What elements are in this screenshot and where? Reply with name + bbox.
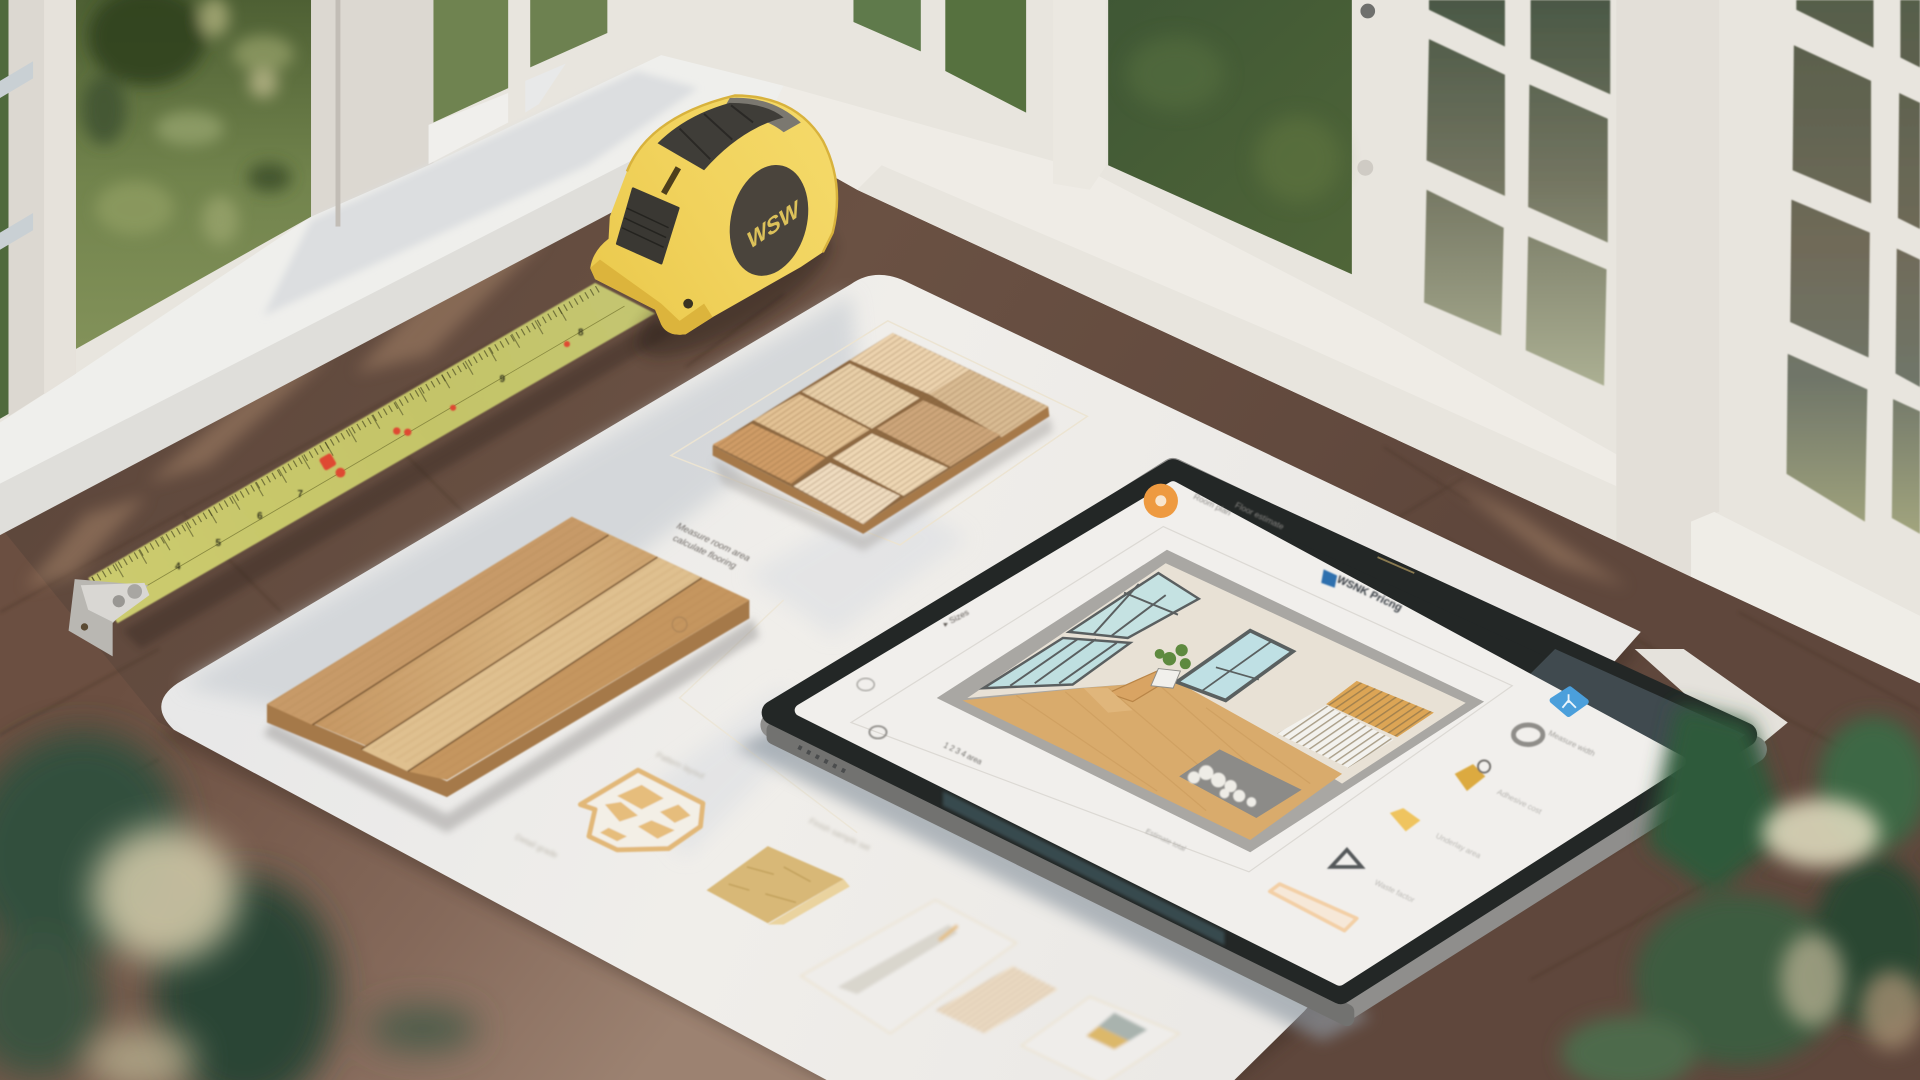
foreground foliage left — [0, 692, 478, 1080]
list: yellow swatch — [1390, 808, 1483, 861]
right bokeh low — [1861, 971, 1920, 1049]
room floor — [962, 681, 1342, 840]
bottom toolbar icon — [869, 726, 887, 738]
card far right — [1021, 997, 1179, 1080]
garden foliage: left — [82, 0, 294, 245]
plank top — [267, 517, 749, 780]
white wall and window frames — [0, 0, 1920, 683]
lock ribs — [622, 208, 669, 247]
shield panels — [600, 785, 691, 841]
plank grain — [267, 517, 749, 780]
hook rivet 2 — [113, 595, 125, 607]
sill: left — [0, 55, 784, 533]
tape red marks — [319, 341, 570, 478]
orange badge — [1144, 484, 1178, 518]
sheet upper shade — [181, 294, 857, 735]
post shading — [336, 0, 340, 227]
list: ring icon — [1513, 725, 1597, 758]
header text: Room plan — [1192, 491, 1233, 518]
tablet — [735, 471, 1753, 1041]
corner pane 2 — [945, 0, 1026, 113]
sunlit reveal under pane — [429, 93, 508, 164]
plank knot — [672, 617, 687, 632]
floor boards — [1016, 683, 1310, 811]
lower sample cards — [801, 900, 1179, 1080]
side label: ▸ Sizes — [941, 607, 971, 629]
bezel reflection lower — [943, 791, 1224, 945]
view: far left sliver — [0, 0, 9, 419]
far right sill — [1691, 512, 1920, 683]
sheet shading bands — [637, 490, 967, 857]
tape case shadow — [622, 209, 847, 379]
rug fluff — [1188, 765, 1256, 807]
right window panes — [1424, 0, 1610, 386]
tablet screen — [801, 487, 1680, 980]
right window hardware — [1357, 4, 1375, 176]
right bokeh mid — [1780, 933, 1844, 1026]
dim panel label: Estimate total — [1144, 826, 1188, 853]
triangle label: Waste factor — [1373, 878, 1417, 905]
left post shade — [311, 0, 433, 230]
far right window panes — [1787, 0, 1920, 534]
card stripes on oak — [936, 966, 1058, 1033]
swatch label: Underlay area — [1434, 831, 1483, 861]
caption second line: calculate flooring — [671, 533, 739, 571]
sill: right front face — [857, 165, 1616, 541]
tape fine ticks — [93, 288, 600, 580]
tape numbers: 5 — [216, 538, 222, 549]
large oak plank sample — [263, 517, 759, 833]
header text 2: Floor estimate — [1233, 500, 1286, 532]
logo text: WSW — [746, 195, 801, 256]
lock slot — [664, 168, 678, 193]
tape numbers — [175, 328, 584, 572]
window bars — [1010, 584, 1178, 686]
sill: left shadow — [263, 71, 698, 316]
tiles — [713, 333, 1048, 524]
upper left pane 2 — [530, 0, 607, 67]
bezel reflection — [1518, 649, 1745, 784]
tape numbers: 8 — [578, 328, 584, 339]
badge core — [1155, 495, 1166, 506]
plant stand — [1108, 671, 1173, 702]
frame: far left bars — [0, 61, 33, 250]
paper sheet — [161, 275, 1641, 1080]
square top — [707, 846, 844, 923]
upper left pane — [433, 0, 508, 122]
tablet bezel — [774, 471, 1745, 992]
wood tile sample — [713, 333, 1053, 551]
sill: left front face — [0, 108, 759, 535]
room drawing — [937, 550, 1484, 852]
tape centre line — [122, 306, 624, 600]
caption beside planks: Measure room area — [675, 521, 752, 563]
left tool icon — [857, 678, 874, 691]
ring label: Measure width — [1547, 729, 1597, 758]
plant — [1155, 644, 1191, 669]
tile sample shadow — [713, 416, 1053, 551]
tape long ticks — [96, 306, 576, 584]
grip ribs — [680, 105, 753, 159]
big window lower pane — [983, 638, 1130, 688]
grip outer — [720, 98, 801, 132]
sample outline — [671, 321, 1087, 545]
tile sample thickness — [713, 407, 1049, 534]
card chart accent — [939, 926, 958, 940]
orange blind — [1326, 681, 1434, 737]
tape hook — [69, 579, 149, 656]
plank tone 1 — [267, 517, 609, 725]
sheet label: Pattern layout — [654, 750, 707, 781]
sheet labels: Detail grade — [513, 832, 560, 860]
lock slider — [617, 189, 678, 263]
shield icon — [580, 770, 703, 850]
tape numbers: 4 — [175, 561, 181, 572]
room frame — [937, 550, 1484, 852]
logo oval — [719, 157, 819, 284]
foreground foliage right — [1561, 704, 1920, 1080]
tile base — [713, 333, 1048, 524]
sunlit reveal 2 — [525, 64, 566, 113]
tablet underside — [774, 730, 1347, 1019]
frame: far left post light — [44, 0, 76, 394]
right bokeh — [1762, 798, 1880, 867]
frame: far left post — [9, 0, 76, 416]
bokeh highlight low — [86, 1029, 196, 1080]
window block right of corner — [1053, 0, 1106, 190]
tape blade — [88, 283, 655, 623]
plant pot — [1151, 669, 1180, 688]
outline lower section — [680, 600, 857, 833]
card chart strip — [838, 924, 958, 994]
tape numbers: 6 — [257, 511, 263, 522]
tile grain — [713, 333, 1048, 524]
right post — [1616, 0, 1719, 577]
sheet labels — [513, 750, 873, 860]
sill: right shelf — [759, 86, 1616, 541]
tablet shadow — [735, 722, 1371, 1041]
plank tone 2 — [361, 557, 702, 771]
plank edge — [267, 600, 749, 797]
bokeh highlight — [92, 827, 239, 961]
tape measure — [69, 96, 847, 656]
small window — [1177, 631, 1293, 700]
room wall — [967, 563, 1466, 784]
list: bucket icon — [1455, 760, 1544, 816]
blue action button — [1553, 689, 1586, 714]
app title: WSNK Pricng — [1334, 574, 1404, 614]
rug — [1179, 749, 1302, 818]
bench — [1084, 688, 1133, 713]
big window — [983, 573, 1199, 688]
square grain — [729, 867, 811, 902]
tape numbers: 7 — [298, 489, 304, 500]
case base shade — [590, 260, 713, 335]
square pale edge — [768, 879, 850, 924]
plank tone 3 — [408, 578, 749, 780]
tape numbers: 9 — [500, 374, 506, 385]
case rim — [627, 96, 837, 252]
centre garden mottling — [1127, 37, 1341, 202]
sheet shadow — [159, 294, 1641, 1080]
blue logo — [1321, 569, 1337, 588]
blue action glyph — [1562, 694, 1576, 708]
small oak square — [707, 846, 850, 924]
strip beside tablet — [1635, 649, 1788, 753]
radiator slats — [1277, 705, 1393, 768]
camera notch — [1378, 557, 1414, 573]
card swatch gold — [1086, 1026, 1129, 1049]
white radiator — [1277, 705, 1393, 768]
hook rivets — [127, 584, 142, 599]
card swatch teal — [1098, 1013, 1147, 1041]
plank shadow — [263, 618, 759, 833]
bottom toolbar text: 1 2 3 4 area — [942, 741, 984, 767]
corner panes — [853, 0, 921, 51]
small window bar — [1202, 642, 1271, 691]
tape shadow — [122, 321, 673, 649]
tablet speaker holes — [798, 747, 850, 774]
view: centre garden — [1108, 0, 1352, 274]
list: triangle icon — [1331, 850, 1417, 905]
bucket handle — [1478, 760, 1490, 773]
card oak — [936, 966, 1058, 1033]
blind slats — [1326, 681, 1434, 737]
case foot hole — [683, 299, 693, 309]
hook slot — [81, 623, 88, 631]
orange outlined button — [1270, 884, 1357, 931]
plank seams — [312, 535, 702, 771]
bucket label: Adhesive cost — [1495, 787, 1544, 816]
tape case — [590, 96, 837, 335]
tablet metal edge — [774, 471, 1753, 1007]
grip — [658, 103, 784, 170]
hook highlight — [81, 583, 149, 622]
sheet label: Finish sample set — [807, 816, 873, 853]
view: left garden — [76, 0, 311, 349]
screen outline — [851, 527, 1512, 872]
